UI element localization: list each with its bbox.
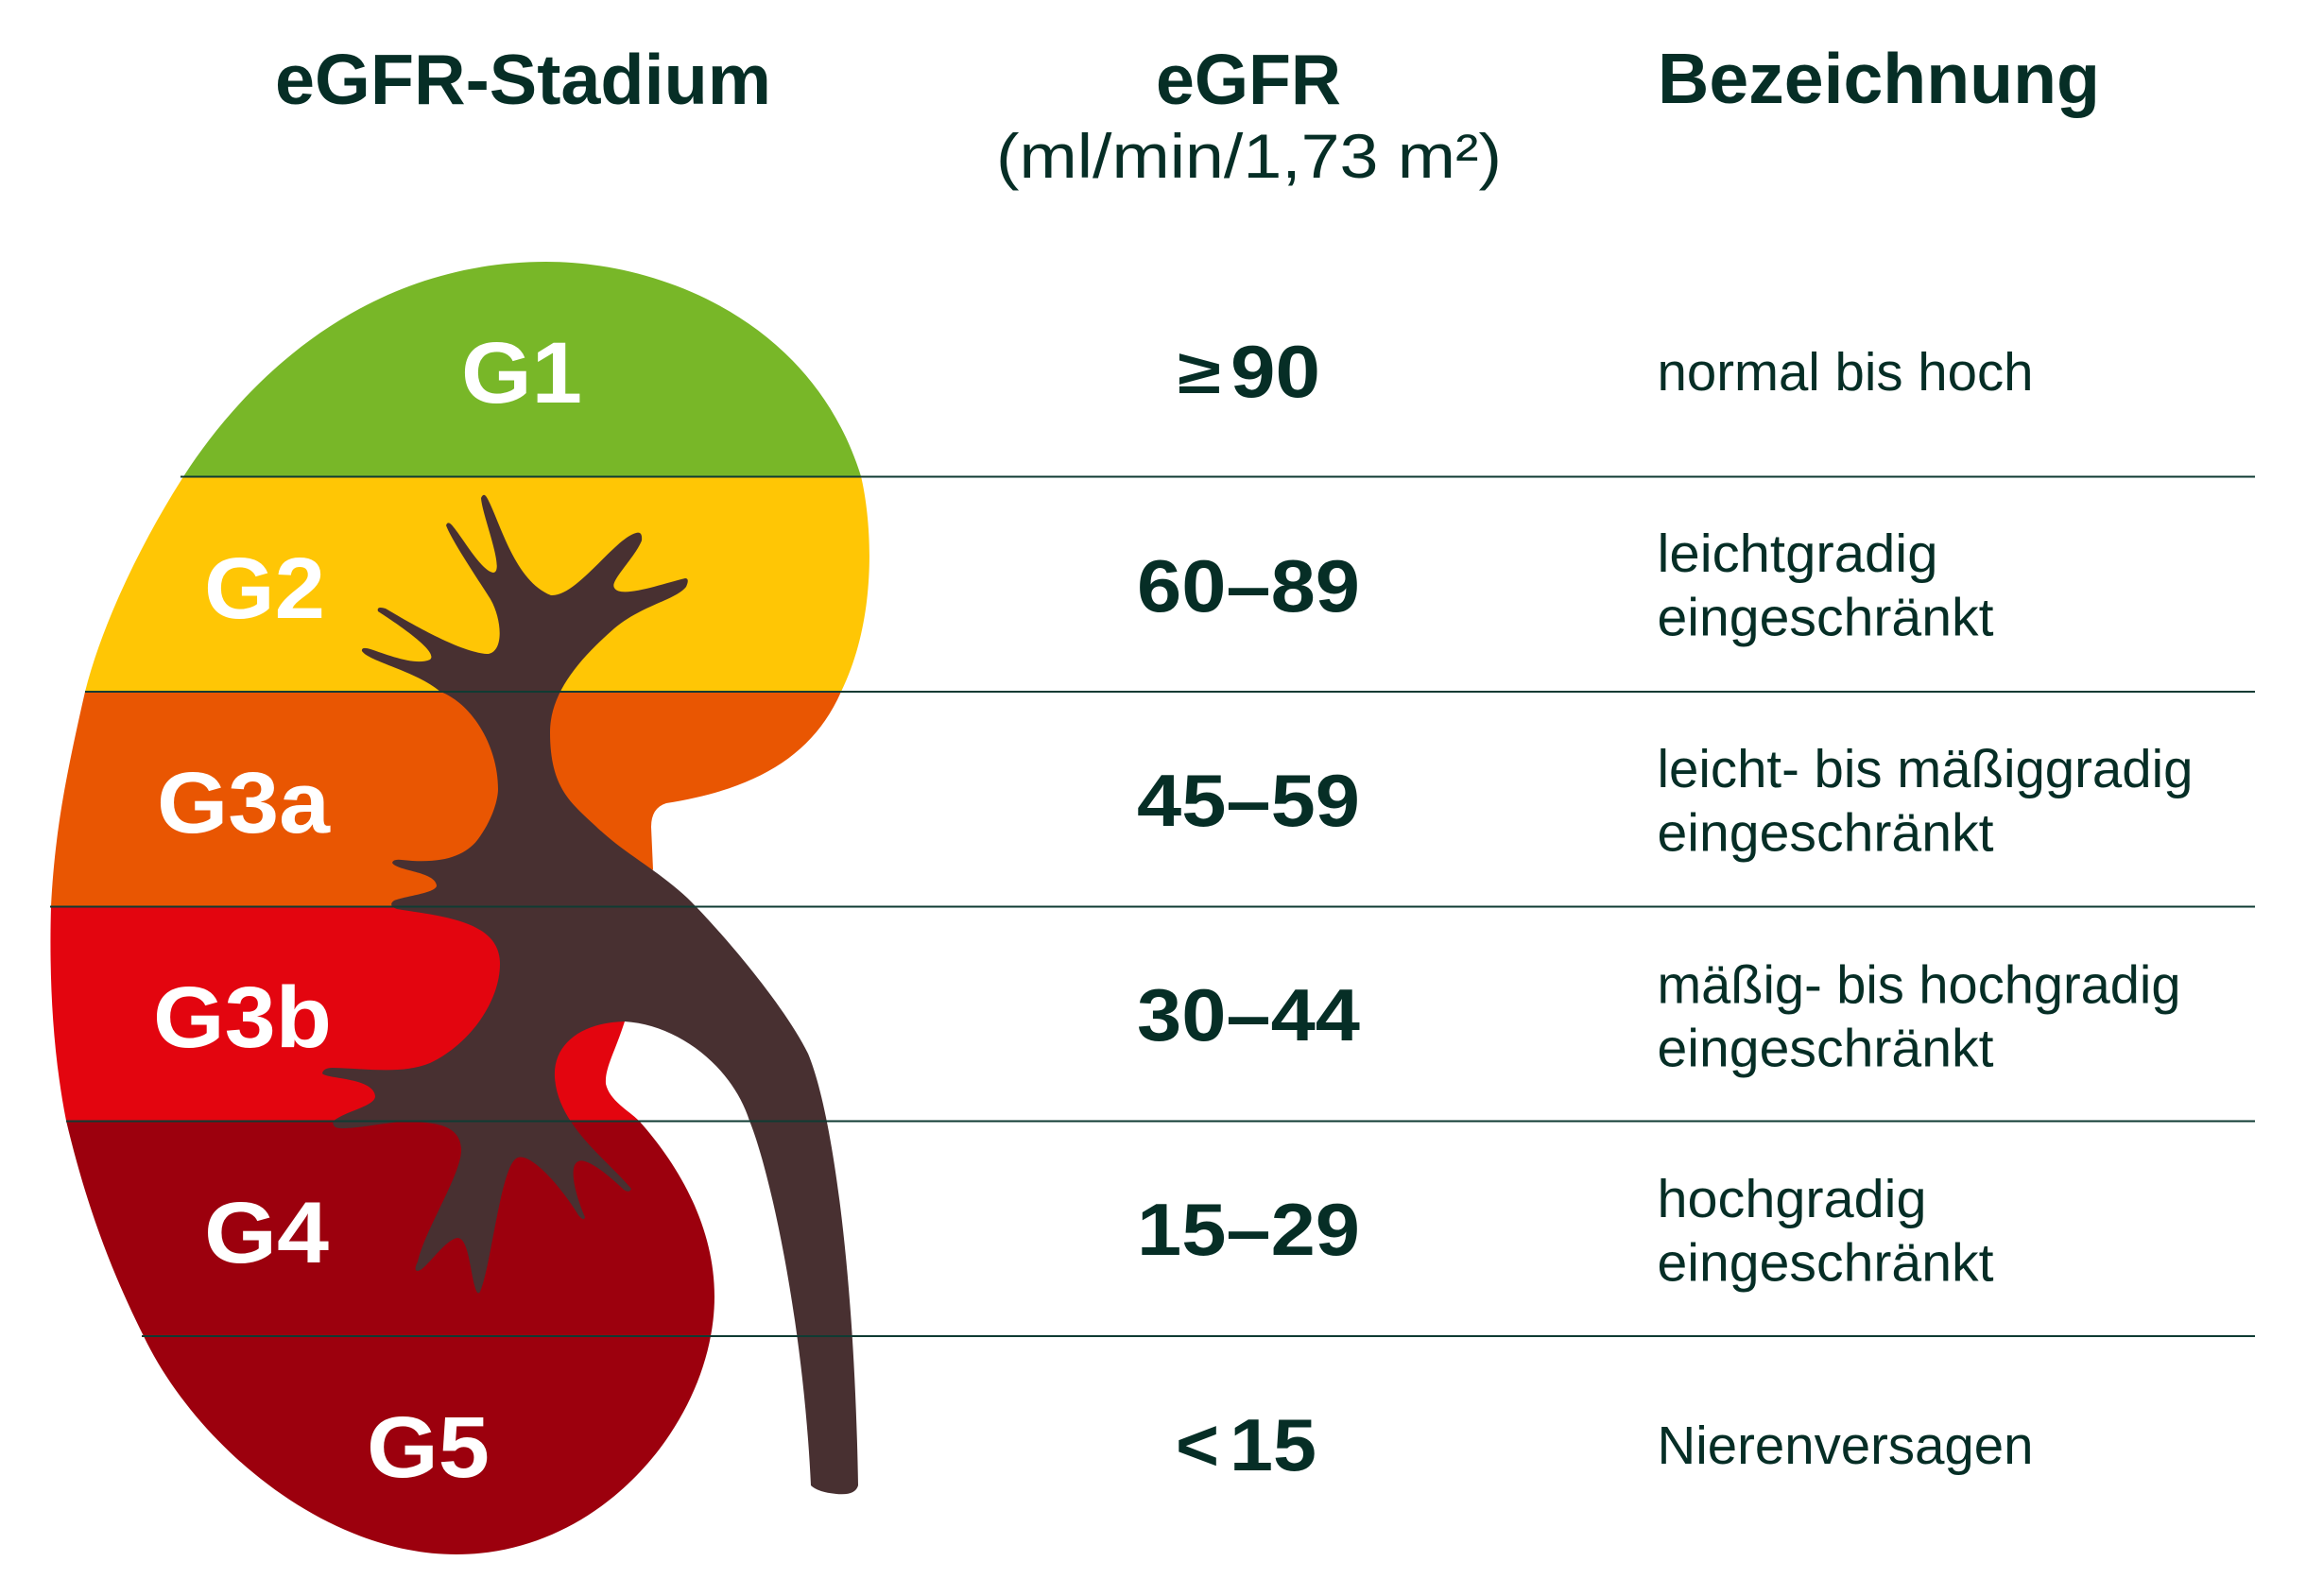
descriptions: Nierenversagen [1658,1416,2034,1476]
heading: eGFR: eGFR [1156,40,1341,119]
descriptions: leichtgradig [1658,523,1937,584]
stage labels: G2 [204,541,325,637]
eGFR values: 30–44 [1137,973,1360,1056]
kidney colour bands [50,262,869,1554]
kidney diagram [50,262,869,1554]
eGFR values: 60–89 [1137,544,1360,627]
eGFR values: 15 [1230,1403,1316,1486]
eGFR values: 45–59 [1137,759,1360,842]
descriptions: normal bis hoch [1658,342,2034,403]
stage labels: G1 [461,325,582,421]
stage labels: G3b [153,970,332,1066]
eGFR values: 90 [1230,330,1320,413]
descriptions: hochgradig [1658,1169,1926,1229]
descriptions: eingeschränkt [1658,588,1994,648]
descriptions: eingeschränkt [1658,803,1994,864]
eGFR values [1137,330,1360,1486]
renal pelvis and ureter [322,495,858,1494]
column headers [275,39,2100,191]
row divider lines [50,476,2255,1336]
heading: eGFR: (ml/min/1,73 m²) [996,121,1502,191]
descriptions: eingeschränkt [1658,1019,1994,1079]
descriptions [1658,342,2193,1476]
descriptions: leicht- bis mäßiggradig [1658,739,2193,799]
eGFR values: 15–29 [1137,1188,1360,1271]
eGFR values: < [1176,1403,1219,1486]
stage labels: G3a [157,755,331,851]
heading: Bezeichnung: Bezeichnung [1658,39,2100,118]
heading: eGFR-Stadium: eGFR-Stadium [275,40,771,119]
descriptions: mäßig- bis hochgradig [1658,954,2181,1015]
stage labels [153,325,582,1496]
descriptions: eingeschränkt [1658,1232,1994,1293]
heading: eGFR [996,40,1502,191]
stage labels: G4 [204,1185,329,1281]
stage labels: G5 [367,1399,490,1496]
eGFR values: ≥ [1178,336,1221,406]
